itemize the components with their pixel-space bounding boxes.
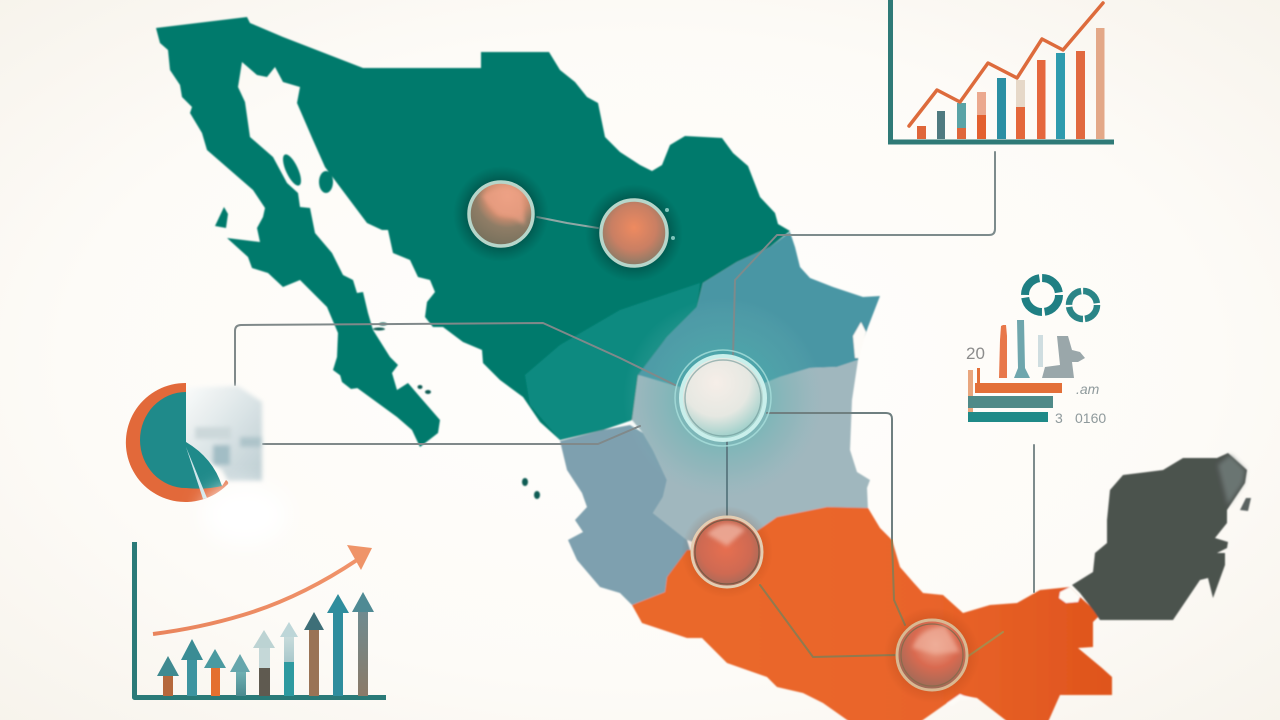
- ring charts: [1025, 278, 1097, 319]
- region: southern orange: [632, 507, 1112, 720]
- node: south: [681, 506, 773, 598]
- lagoon: [853, 322, 866, 358]
- line to pie chart lower: [263, 426, 640, 444]
- mixed chart: right: 0160: [1075, 410, 1106, 426]
- olive connector south: [760, 585, 897, 657]
- line centre to south node: [726, 440, 728, 515]
- line centre to east: [767, 413, 892, 540]
- arrow chart: bottom left: [134, 542, 386, 698]
- mixed chart: right: [966, 278, 1106, 426]
- region: mid teal: [525, 283, 700, 440]
- connector lines: [235, 152, 1034, 657]
- soft white patch: [203, 485, 287, 545]
- pie chart: left: [126, 383, 262, 502]
- node: central: [675, 350, 771, 446]
- vertical bars: [999, 320, 1085, 378]
- line to pie chart upper: [235, 323, 675, 385]
- node: north-east: [585, 184, 683, 282]
- bar and line chart: top right: [890, 0, 1114, 142]
- line to right chart: [1033, 445, 1035, 592]
- white patches: [1059, 587, 1080, 603]
- region: western steel blue: [560, 425, 690, 605]
- pale wedge: [186, 447, 207, 499]
- region: Yucatan dark grey: [1072, 453, 1251, 620]
- region: gulf blue: [638, 232, 880, 400]
- trend arrow: [153, 545, 372, 634]
- rising arrows: [157, 592, 374, 696]
- line to top right chart: [733, 152, 995, 358]
- olive connector right: [967, 632, 1003, 657]
- bars: [917, 28, 1104, 139]
- trend line: [909, 3, 1103, 126]
- node: north-west: [453, 166, 549, 262]
- olive connector east: [892, 540, 905, 625]
- central glow: [623, 298, 823, 498]
- labels: 20: [966, 344, 985, 363]
- region: central grey: [632, 360, 870, 552]
- teal fill: [140, 392, 222, 489]
- mixed chart: right: .am: [1076, 381, 1100, 397]
- axes: [890, 0, 1114, 142]
- node: south-east: [884, 607, 980, 703]
- grey blocks: [183, 386, 262, 481]
- region: northern teal with Baja California: [156, 17, 790, 499]
- horizontal bars: [968, 368, 1062, 422]
- mixed chart: right: 3: [1055, 410, 1063, 426]
- axes: [134, 542, 386, 698]
- orange ring: [126, 383, 228, 502]
- link between north nodes: [537, 217, 598, 228]
